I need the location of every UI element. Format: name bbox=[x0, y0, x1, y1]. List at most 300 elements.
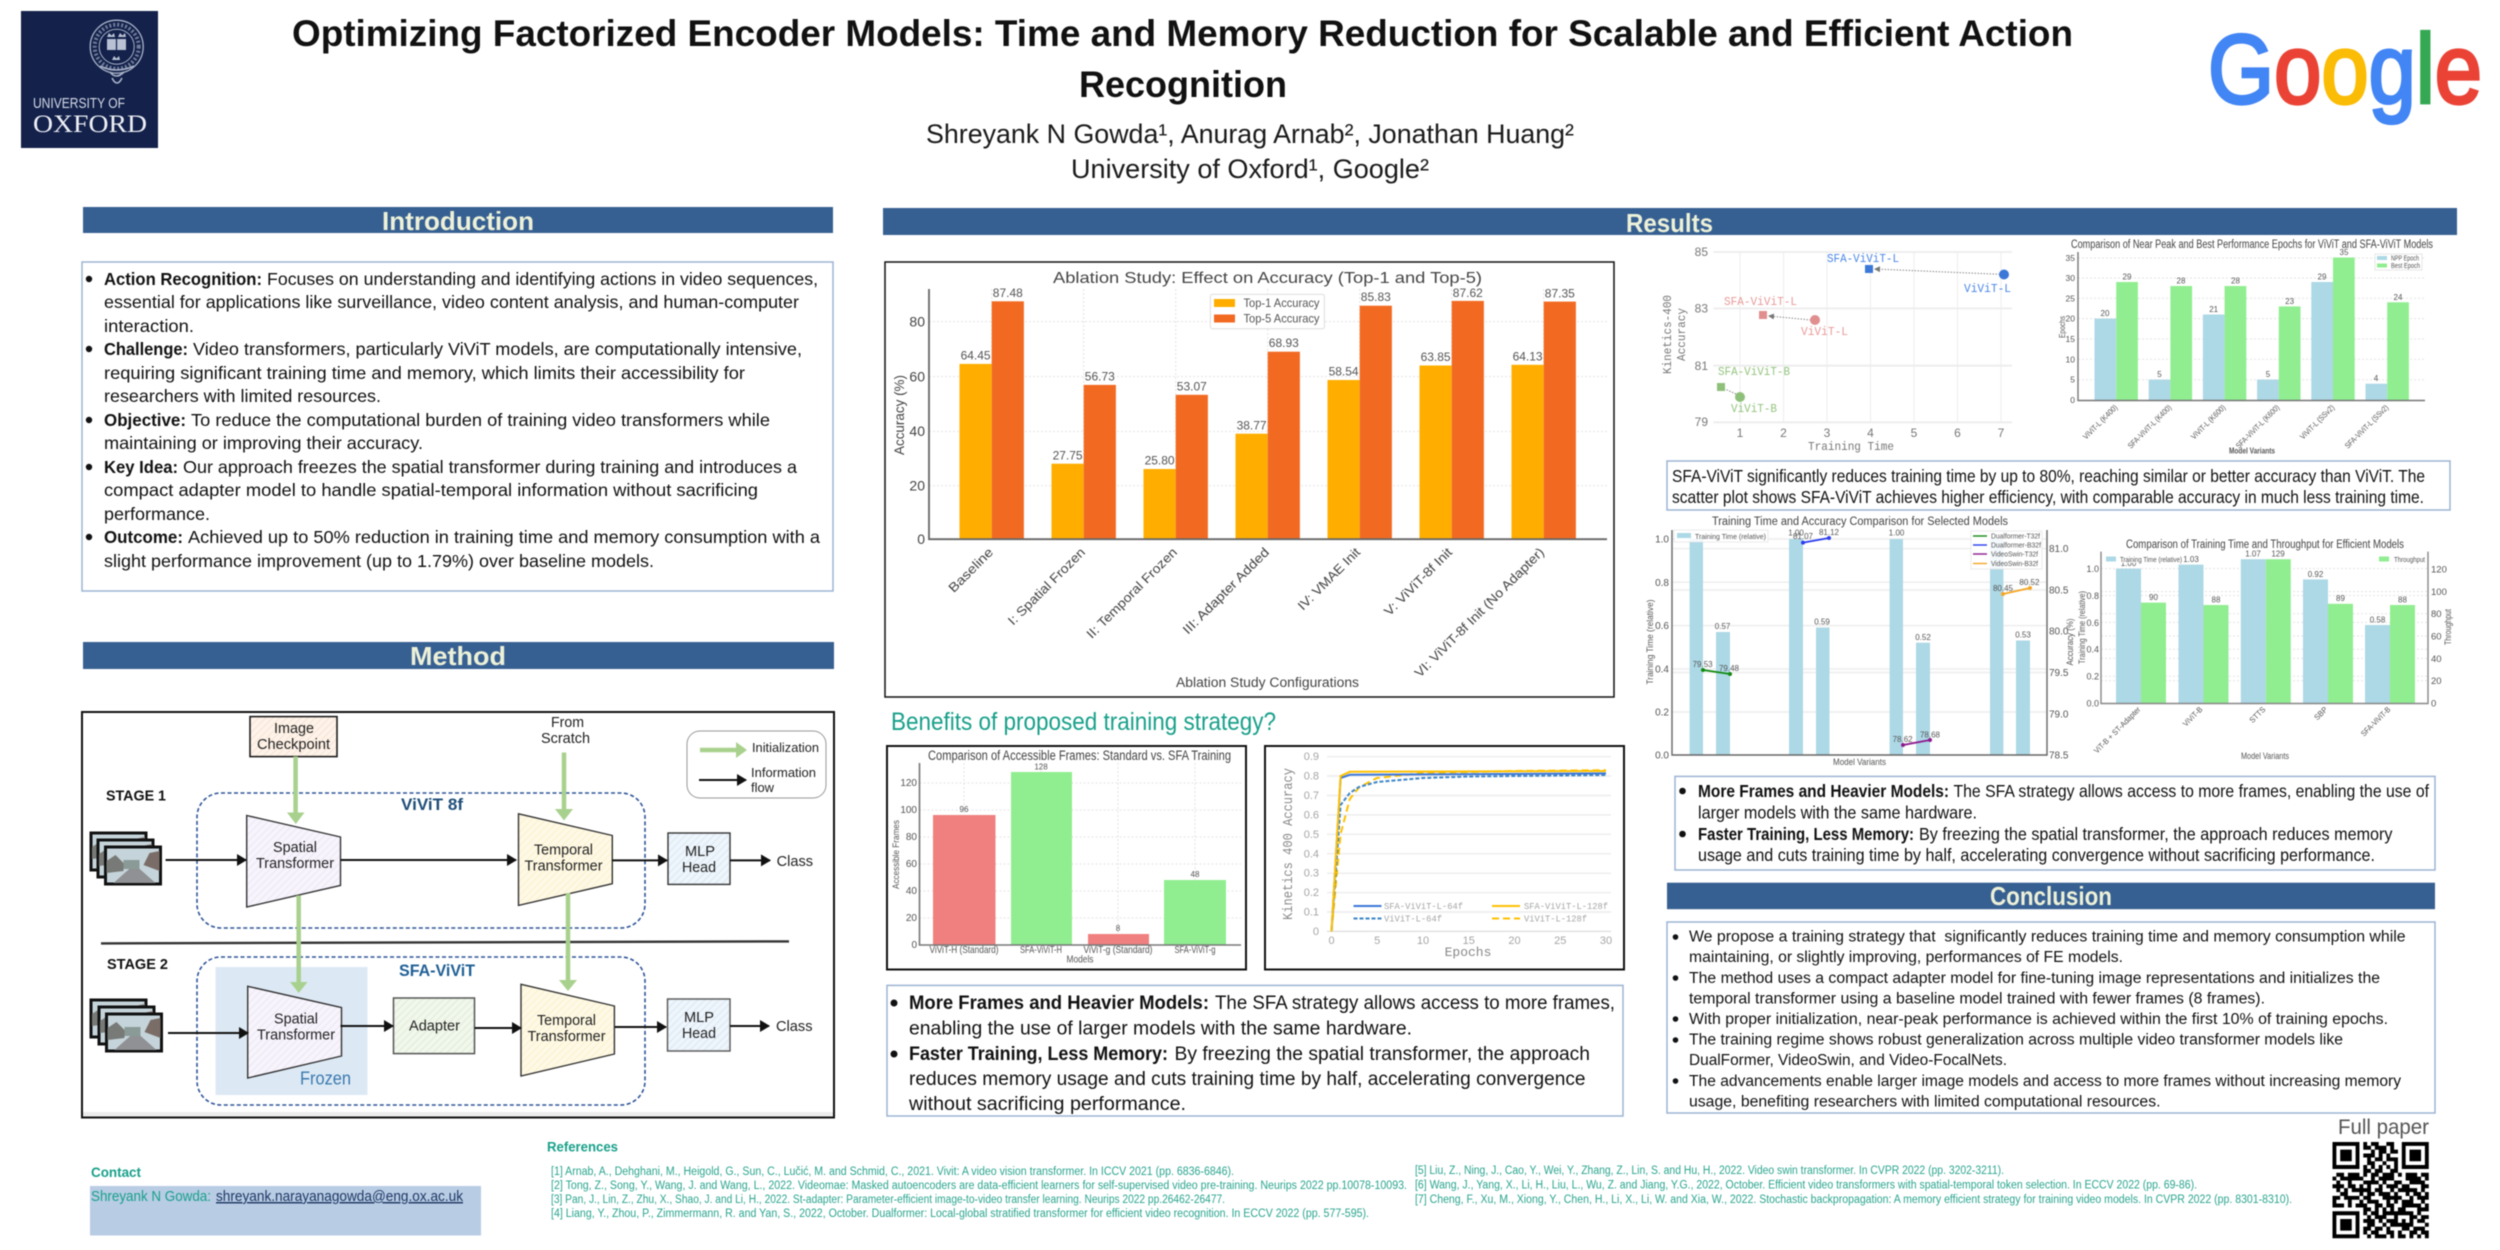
combo chart: training time and accuracy: 78.62 bbox=[1893, 735, 1913, 744]
combo chart: training time and accuracy: Training Time (relative) bbox=[1645, 600, 1655, 684]
panel: benefits text: The SFA strategy allows access to more frames, bbox=[1215, 993, 1615, 1014]
bar chart: near peak and best performance epochs: 5 bbox=[2070, 375, 2075, 385]
combo chart: training time and throughput: 89 bbox=[2336, 594, 2345, 603]
panel: accessible frames bar chart: ViViT-H (Standard) bbox=[930, 944, 998, 956]
legend: Top-1 Accuracy bbox=[1244, 296, 1320, 310]
bar chart: near peak and best performance epochs: 10 bbox=[2066, 354, 2075, 364]
MLP head stage 2 bbox=[668, 999, 730, 1051]
bar chart: near peak and best performance epochs: 4 bbox=[2374, 374, 2379, 383]
curve: ViViT-L-128f bbox=[1332, 770, 1606, 931]
panel: benefits text bbox=[887, 985, 1623, 1116]
panel: kinetics 400 accuracy line chart: 0.3 bbox=[1304, 868, 1319, 880]
legends: Throughput bbox=[2394, 557, 2425, 564]
scatter plot: training time vs accuracy: 1 bbox=[1737, 426, 1744, 440]
panel: accessible frames bar chart: 128 bbox=[1034, 762, 1048, 772]
panel: conclusion text: The training regime shows robust generalization across multiple video transformer models like bbox=[1689, 1032, 2343, 1048]
x axis category labels: VI: ViViT-8f Init (No Adapter) bbox=[1411, 545, 1547, 680]
x axis title: Ablation Study Configurations bbox=[1176, 675, 1359, 690]
panel: kinetics 400 accuracy line chart: 0.8 bbox=[1304, 770, 1319, 782]
bar chart: near peak and best performance epochs: 29 bbox=[2123, 272, 2132, 282]
value labels: 64.45 bbox=[961, 348, 991, 362]
legend: training time bbox=[1674, 530, 1768, 542]
scatter plot: training time vs accuracy: 7 bbox=[1998, 426, 2005, 440]
combo chart: training time and throughput: 88 bbox=[2212, 596, 2221, 604]
contact: Contact bbox=[91, 1165, 142, 1180]
MLP head stage 1: Head bbox=[682, 860, 716, 876]
panel: introduction text: Outcome: bbox=[104, 527, 183, 547]
bar chart: near peak and best performance epochs: 5 bbox=[2266, 370, 2271, 379]
combo chart: training time and throughput: 129 bbox=[2271, 550, 2285, 558]
panel: results text bbox=[1675, 776, 2435, 870]
panel: kinetics 400 accuracy line chart: 15 bbox=[1463, 935, 1475, 947]
spatial transformer stage 1: Transformer bbox=[256, 856, 334, 872]
combo chart: training time and throughput: 88 bbox=[2398, 596, 2407, 604]
bar chart: near peak and best performance epochs: 0 bbox=[2070, 395, 2075, 405]
combo chart: training time and throughput: 20 bbox=[2431, 676, 2442, 687]
panel: kinetics 400 accuracy line chart: 30 bbox=[1600, 935, 1612, 947]
references: [2] Tong, Z., Song, Y., Wang, J. and Wang, L., 2022. Videomae: Masked autoencoders are data-efficient learners for self-supervised video pre-training. Neurips 2022 pp.10078-10093. bbox=[551, 1180, 1407, 1192]
panel: introduction text: compact adapter model to handle spatial-temporal information without sacrificing bbox=[104, 480, 758, 500]
class label stage 1: Class bbox=[777, 854, 813, 870]
title: Optimizing Factorized Encoder Models: Time and Memory Reduction for Scalable and Efficient Action bbox=[292, 13, 2073, 54]
combo chart: training time and throughput: 0.6 bbox=[2086, 618, 2099, 628]
combo chart: training time and throughput: 90 bbox=[2149, 593, 2158, 602]
value labels: 25.80 bbox=[1145, 454, 1175, 468]
contact bbox=[90, 1165, 481, 1236]
combo chart: training time and accuracy: 80.5 bbox=[2049, 586, 2069, 596]
combo chart: training time and accuracy: 0.0 bbox=[1655, 750, 1669, 762]
combo chart: training time and throughput: 120 bbox=[2431, 564, 2447, 576]
contact: shreyank.narayanagowda@eng.ox.ac.uk bbox=[216, 1189, 464, 1205]
heading: Results: Results bbox=[1626, 208, 1713, 238]
bar chart: near peak and best performance epochs: 24 bbox=[2394, 293, 2403, 302]
panel: kinetics 400 accuracy line chart: 0.6 bbox=[1304, 809, 1319, 821]
panel: ablation study bar chart bbox=[885, 262, 1614, 697]
references: [3] Pan, J., Lin, Z., Zhu, X., Shao, J. and Li, H., 2022. St-adapter: Parameter-efficient image-to-video transfer learning. Neurips 2022 pp.26462-26477. bbox=[551, 1194, 1225, 1206]
panel: kinetics 400 accuracy line chart: 0 bbox=[1328, 935, 1335, 947]
combo chart: training time and accuracy: 79.53 bbox=[1693, 660, 1713, 669]
stage labels: STAGE 2 bbox=[107, 956, 168, 973]
panel: kinetics 400 accuracy line chart bbox=[1265, 746, 1624, 970]
legend: training time: Training Time (relative) bbox=[1695, 532, 1766, 541]
scatter plot: training time vs accuracy: SFA-ViViT-L bbox=[1724, 296, 1797, 309]
legend: models: VideoSwin-B32f bbox=[1991, 559, 2039, 568]
legend: models bbox=[1971, 531, 2042, 569]
scatter plot: training time vs accuracy: ViViT-L bbox=[1801, 326, 1848, 339]
scatter plot: training time vs accuracy: 2 bbox=[1780, 426, 1787, 440]
panel: kinetics 400 accuracy line chart: 0 bbox=[1313, 926, 1319, 938]
MLP head stage 1 bbox=[668, 833, 730, 884]
arrows stage 1 bbox=[166, 859, 770, 861]
value labels: 68.93 bbox=[1269, 336, 1299, 350]
panel: benefits text: without sacrificing performance. bbox=[908, 1094, 1186, 1115]
MLP head stage 2: MLP bbox=[684, 1010, 714, 1026]
bars top-5 bbox=[992, 301, 1576, 539]
panel: benefits text: More Frames and Heavier Models: bbox=[909, 993, 1209, 1014]
panel: accessible frames bar chart: Accessible Frames bbox=[891, 820, 902, 889]
authors and affiliations: Shreyank N Gowda¹, Anurag Arnab², Jonathan Huang² bbox=[926, 119, 1574, 149]
panel: introduction text: requiring significant training time and memory, which limits their accessibility for bbox=[104, 363, 745, 383]
accuracy lines bbox=[1703, 538, 2030, 745]
combo chart: training time and throughput: ViT-B + ST-Adapter bbox=[2092, 705, 2143, 755]
panel: conclusion text: The method uses a compact adapter model for fine-tuning image representations and initializes the bbox=[1689, 970, 2380, 987]
panel: conclusion text: temporal transformer using a baseline model trained with fewer frames (8 frames). bbox=[1689, 991, 2265, 1008]
scatter plot: training time vs accuracy: 6 bbox=[1954, 426, 1961, 440]
bars top-1 bbox=[960, 364, 1544, 539]
combo chart: training time and accuracy: 80.52 bbox=[2019, 578, 2040, 587]
x axis category labels: I: Spatial Frozen bbox=[1005, 545, 1088, 628]
panel: results text: usage and cuts training time by half, accelerating convergence without sacrificing performance. bbox=[1698, 845, 2375, 865]
panel: conclusion text: maintaining, or slightly improving, performances of FE models. bbox=[1689, 949, 2123, 966]
panel: benefits text: Faster Training, Less Memory: bbox=[909, 1044, 1168, 1065]
logo: University of Oxford: OXFORD bbox=[33, 111, 147, 138]
panel: conclusion text bbox=[1667, 922, 2435, 1113]
references: [5] Liu, Z., Ning, J., Cao, Y., Wei, Y., Zhang, Z., Lin, S. and Hu, H., 2022. Video swin transformer. In CVPR 2022 (pp. 3202-3211). bbox=[1415, 1165, 2004, 1177]
spatial transformer stage 1: Spatial bbox=[273, 840, 317, 856]
contact: Shreyank N Gowda: bbox=[91, 1189, 211, 1205]
panel: kinetics 400 accuracy line chart: Epochs bbox=[1445, 945, 1491, 960]
combo chart: training time and throughput: Comparison of Training Time and Throughput for Efficient Models bbox=[2126, 539, 2404, 551]
temporal transformer stage 2: Transformer bbox=[528, 1029, 606, 1045]
panel: accessible frames bar chart: 96 bbox=[960, 805, 969, 814]
legend: NPP Epoch bbox=[2391, 256, 2419, 262]
combo chart: training time and accuracy: 0.8 bbox=[1655, 578, 1669, 589]
curve: ViViT-L-64f bbox=[1332, 775, 1606, 931]
panel: introduction text: essential for applications like surveillance, video content analysis, and human-computer bbox=[104, 292, 799, 312]
panel: introduction text: Key Idea: bbox=[104, 457, 178, 477]
combo chart: training time and throughput: Model Variants bbox=[2241, 751, 2289, 761]
panel: kinetics 400 accuracy line chart: 25 bbox=[1554, 935, 1566, 947]
from scratch label bbox=[541, 715, 590, 747]
panel: accessible frames bar chart: SFA-ViViT-g bbox=[1174, 944, 1216, 956]
panel: introduction text: slight performance improvement (up to 1.79%) over baseline models. bbox=[104, 551, 654, 571]
panel: introduction text: To reduce the computational burden of training video transformers while bbox=[191, 410, 770, 430]
MLP head stage 1: MLP bbox=[685, 844, 715, 860]
heading: Results bbox=[883, 208, 2457, 238]
heading: Method: Method bbox=[410, 641, 506, 671]
legend: models: VideoSwin-T32f bbox=[1991, 550, 2039, 558]
combo chart: training time and throughput: 60 bbox=[2431, 632, 2442, 642]
heading: Introduction: Introduction bbox=[382, 206, 534, 236]
y axis ticks: 40 bbox=[909, 423, 925, 439]
x axis category labels: V: ViViT-8f Init bbox=[1381, 544, 1455, 619]
stage 2 frozen background bbox=[216, 967, 368, 1095]
combo chart: training time and accuracy: 1.00 bbox=[1788, 529, 1804, 538]
legend: Best Epoch bbox=[2391, 263, 2420, 270]
class label stage 2: Class bbox=[776, 1019, 812, 1035]
heading: Introduction bbox=[83, 206, 833, 236]
combo chart: training time and accuracy: 0.59 bbox=[1814, 618, 1830, 627]
dashed box: ViViT 8f bbox=[197, 793, 645, 928]
panel: kinetics 400 accuracy line chart: 0.9 bbox=[1304, 751, 1319, 763]
panel: introduction text: Our approach freezes the spatial transformer during training and introduces a bbox=[183, 457, 797, 477]
panel: kinetics 400 accuracy line chart: 5 bbox=[1374, 935, 1380, 947]
stage labels bbox=[106, 788, 168, 973]
image checkpoint box: Image bbox=[274, 721, 314, 737]
panel: kinetics 400 accuracy line chart: 0.2 bbox=[1304, 887, 1319, 899]
combo chart: training time and accuracy: 0.6 bbox=[1655, 621, 1669, 632]
combo chart: training time and throughput: Throughput bbox=[2443, 609, 2453, 645]
temporal transformer stage 1 bbox=[518, 814, 612, 905]
combo chart: training time and accuracy: 0.57 bbox=[1715, 622, 1731, 631]
combo chart: training time and throughput: 1.0 bbox=[2086, 564, 2099, 574]
combo chart: training time and throughput: Training Time (relative) bbox=[2077, 591, 2087, 664]
panel: introduction text: Video transformers, particularly ViViT models, are computationally intensive, bbox=[193, 339, 802, 359]
dashed box: ViViT 8f: ViViT 8f bbox=[401, 795, 463, 814]
panel: introduction text: researchers with limited resources. bbox=[104, 386, 381, 406]
legend: Top-5 Accuracy bbox=[1244, 312, 1320, 326]
green initialization arrows bbox=[287, 752, 577, 993]
combo chart: training time and throughput: 0.92 bbox=[2308, 570, 2324, 579]
title: Recognition bbox=[1079, 64, 1287, 105]
combo chart: training time and throughput: SFA-ViViT-B bbox=[2359, 705, 2392, 738]
y axis ticks: 60 bbox=[909, 368, 925, 384]
panel: results text: The SFA strategy allows access to more frames, enabling the use of bbox=[1954, 781, 2429, 801]
bar chart: near peak and best performance epochs: 35 bbox=[2066, 253, 2075, 263]
value labels: 27.75 bbox=[1053, 448, 1083, 462]
references bbox=[547, 1140, 2292, 1220]
heading: Conclusion bbox=[1667, 881, 2435, 911]
authors and affiliations bbox=[926, 119, 1574, 184]
temporal transformer stage 1: Temporal bbox=[534, 842, 593, 858]
arrows stage 2 bbox=[168, 1026, 769, 1033]
legend bbox=[687, 731, 826, 798]
y axis label: Accuracy (%) bbox=[891, 375, 907, 455]
combo chart: training time and accuracy: 79.5 bbox=[2049, 668, 2069, 679]
panel: conclusion text: With proper initialization, near-peak performance is achieved within the first 10% of training epochs. bbox=[1689, 1011, 2388, 1028]
bar chart: near peak and best performance epochs: ViViT-L (SSv2) bbox=[2298, 403, 2337, 441]
panel: accessible frames bar chart bbox=[887, 746, 1246, 970]
panel: kinetics 400 accuracy line chart: 10 bbox=[1417, 935, 1429, 947]
x axis category labels bbox=[945, 544, 1547, 680]
combo chart: training time and throughput: 1.03 bbox=[2183, 555, 2199, 564]
frozen label: Frozen bbox=[300, 1068, 351, 1088]
panel: introduction text: Objective: bbox=[104, 410, 186, 430]
temporal transformer stage 1: Transformer bbox=[524, 858, 603, 874]
bar chart: near peak and best performance epochs: 20 bbox=[2101, 309, 2110, 318]
panel: conclusion text: usage, benefiting researchers with limited computational resources. bbox=[1689, 1094, 2160, 1110]
panel: introduction text: Action Recognition: bbox=[104, 269, 262, 289]
combo chart: training time and throughput: SBP bbox=[2312, 705, 2329, 722]
scatter plot: training time vs accuracy: Accuracy bbox=[1675, 308, 1689, 361]
combo chart: training time and accuracy: 79.48 bbox=[1719, 664, 1740, 673]
divider between stages bbox=[101, 941, 789, 943]
x axis category labels: Baseline bbox=[945, 545, 996, 595]
bar chart: near peak and best performance epochs: SFA-ViViT-L (SSv2) bbox=[2343, 403, 2391, 450]
caption box: SFA-ViViT efficiency bbox=[1667, 461, 2450, 510]
logo: University of Oxford: UNIVERSITY OF bbox=[33, 96, 125, 112]
combo chart: training time and throughput: 1.00 bbox=[2121, 559, 2137, 568]
panel: accessible frames bar chart: 100 bbox=[900, 805, 917, 816]
combo chart: training time and throughput: ViViT-B bbox=[2181, 705, 2204, 728]
combo chart: training time and accuracy: 80.45 bbox=[1993, 584, 2014, 593]
value labels: 85.83 bbox=[1361, 290, 1391, 304]
spatial transformer stage 1 bbox=[247, 816, 340, 907]
scatter plot: training time vs accuracy: 4 bbox=[1867, 426, 1874, 440]
heading: Conclusion: Conclusion bbox=[1990, 881, 2112, 911]
legend: ViViT-L-64f bbox=[1384, 914, 1442, 924]
combo chart: training time and accuracy: 0.52 bbox=[1915, 633, 1931, 642]
combo chart: training time and accuracy: 78.5 bbox=[2049, 750, 2069, 762]
bar chart: near peak and best performance epochs: 20 bbox=[2066, 314, 2075, 324]
legend bbox=[2375, 254, 2422, 270]
y axis ticks: 80 bbox=[909, 314, 925, 330]
panel: kinetics 400 accuracy line chart: 20 bbox=[1508, 935, 1521, 947]
bar chart: near peak and best performance epochs: 21 bbox=[2209, 305, 2219, 314]
panel: results text: By freezing the spatial transformer, the approach reduces memory bbox=[1919, 824, 2393, 844]
scatter plot: training time vs accuracy: 5 bbox=[1911, 426, 1918, 440]
bar chart: near peak and best performance epochs: 15 bbox=[2066, 334, 2075, 344]
bar chart: near peak and best performance epochs: ViViT-L (K600) bbox=[2189, 403, 2228, 441]
panel: results text: larger models with the same hardware. bbox=[1698, 802, 1977, 822]
title bbox=[292, 13, 2073, 105]
input frames stage 1 bbox=[91, 833, 160, 884]
bar chart: near peak and best performance epochs bbox=[2058, 239, 2433, 456]
panel: accessible frames bar chart: 48 bbox=[1191, 870, 1200, 879]
panel: accessible frames bar chart: 0 bbox=[911, 940, 917, 951]
combo chart: training time and throughput: 100 bbox=[2431, 587, 2447, 598]
panel: introduction text bbox=[82, 262, 833, 591]
scatter plot: training time vs accuracy: SFA-ViViT-B bbox=[1718, 366, 1790, 379]
x axis category labels: III: Adapter Added bbox=[1179, 545, 1272, 637]
heading: Method bbox=[83, 641, 834, 671]
panel: introduction text: maintaining or improving their accuracy. bbox=[104, 433, 423, 453]
panel: benefits text: By freezing the spatial transformer, the approach bbox=[1174, 1044, 1590, 1065]
from scratch label: Scratch bbox=[541, 731, 590, 747]
panel: accessible frames bar chart: SFA-ViViT-H bbox=[1020, 944, 1062, 956]
scatter plot: training time vs accuracy: ViViT-L bbox=[1964, 283, 2011, 296]
y axis ticks: 0 bbox=[917, 531, 925, 547]
combo chart: training time and accuracy: 78.68 bbox=[1920, 730, 1941, 739]
legend bbox=[1210, 294, 1324, 329]
scatter plot: training time vs accuracy: 3 bbox=[1824, 426, 1831, 440]
combo chart: training time and throughput: STTS bbox=[2248, 705, 2267, 725]
panel: kinetics 400 accuracy line chart: 0.1 bbox=[1304, 907, 1319, 919]
bar chart: near peak and best performance epochs: 28 bbox=[2177, 276, 2186, 286]
scatter plot: training time vs accuracy: ViViT-B bbox=[1731, 403, 1777, 416]
panel: accessible frames bar chart: 40 bbox=[906, 886, 917, 897]
combo chart: training time and accuracy: 0.4 bbox=[1655, 664, 1669, 676]
bar chart: near peak and best performance epochs: SFA-ViViT-L (K600) bbox=[2234, 403, 2282, 450]
value labels: 87.62 bbox=[1453, 286, 1483, 300]
references: [7] Cheng, F., Xu, M., Xiong, Y., Chen, H., Li, X., Li, W. and Xia, W., 2022. Stochastic backpropagation: A memory efficient strategy for training video models. In CVPR 2022 (pp. 8301-8310). bbox=[1415, 1194, 2292, 1206]
value labels: 56.73 bbox=[1085, 370, 1115, 384]
combo chart: training time and throughput: 0 bbox=[2431, 698, 2436, 710]
spatial transformer stage 2 bbox=[248, 986, 342, 1078]
temporal transformer stage 2 bbox=[521, 984, 614, 1076]
logo: Google: Google bbox=[2208, 14, 2482, 124]
combo chart: training time and throughput: 0.2 bbox=[2086, 672, 2099, 682]
panel: accessible frames bar chart: ViViT-g (Standard) bbox=[1084, 944, 1152, 956]
legend: SFA-ViViT-L-64f bbox=[1384, 901, 1463, 912]
scatter plot: training time vs accuracy: Kinetics-400 bbox=[1661, 295, 1675, 374]
y axis ticks: 20 bbox=[909, 478, 925, 494]
scatter plot: training time vs accuracy: 79 bbox=[1695, 415, 1708, 429]
combo chart: training time and accuracy: 0.2 bbox=[1655, 708, 1669, 718]
bar chart: near peak and best performance epochs: 30 bbox=[2066, 273, 2075, 283]
bar chart: near peak and best performance epochs: 29 bbox=[2318, 272, 2327, 282]
legend: flow bbox=[751, 780, 775, 795]
combo chart: training time and throughput: 0.8 bbox=[2086, 591, 2099, 601]
legend: ViViT-L-128f bbox=[1524, 914, 1587, 924]
combo chart: training time and throughput: 1.07 bbox=[2245, 550, 2261, 558]
panel: conclusion text: We propose a training strategy that significantly reduces training time and memory consumption while bbox=[1689, 929, 2406, 946]
heading: Benefits: Benefits of proposed training strategy? bbox=[891, 708, 1276, 736]
bar chart: near peak and best performance epochs: 28 bbox=[2231, 276, 2240, 286]
spatial transformer stage 2: Transformer bbox=[257, 1028, 335, 1044]
references: [6] Wang, J., Yang, X., Li, H., Liu, L., Wu, Z. and Jiang, Y.G., 2022, October. Efficient video transformers with spatial-temporal token selection. In ECCV 2022 (pp. 69-86). bbox=[1415, 1180, 2197, 1192]
authors and affiliations: University of Oxford¹, Google² bbox=[1071, 154, 1429, 184]
panel: results text: More Frames and Heavier Models: bbox=[1698, 781, 1949, 801]
legends: Training Time (relative) bbox=[2120, 557, 2182, 564]
image checkpoint box bbox=[250, 717, 337, 757]
curve: SFA-ViViT-L-128f bbox=[1332, 771, 1606, 931]
combo chart: training time and throughput: 0.0 bbox=[2086, 698, 2099, 708]
panel: accessible frames bar chart: Models bbox=[1066, 954, 1094, 966]
value labels bbox=[961, 286, 1575, 468]
scatter plot: training time vs accuracy: Training Time bbox=[1808, 440, 1894, 454]
value labels: 64.13 bbox=[1513, 350, 1543, 364]
adapter box bbox=[394, 998, 474, 1054]
panel: introduction text: Achieved up to 50% reduction in training time and memory consumption with a bbox=[188, 527, 820, 547]
from scratch label: From bbox=[551, 715, 584, 731]
panel: conclusion text: The advancements enable larger image models and access to more frames without increasing memory bbox=[1689, 1073, 2401, 1090]
combo chart: training time and accuracy: Model Variants bbox=[1833, 757, 1886, 767]
scatter plot: training time vs accuracy: 81 bbox=[1695, 359, 1708, 373]
value labels: 53.07 bbox=[1177, 380, 1207, 394]
panel: method diagram bbox=[82, 712, 834, 1118]
combo chart: training time and throughput: 40 bbox=[2431, 654, 2442, 665]
panel: accessible frames bar chart: 80 bbox=[906, 832, 917, 843]
caption box: SFA-ViViT efficiency: SFA-ViViT significantly reduces training time by up to 80%, reaching similar or better accuracy than ViViT. The bbox=[1672, 466, 2425, 486]
QR code bbox=[2332, 1144, 2429, 1236]
panel: accessible frames bar chart: 60 bbox=[906, 859, 917, 870]
panel: results text: Faster Training, Less Memory: bbox=[1698, 824, 1914, 844]
combo chart: training time and accuracy: 81.07 bbox=[1793, 532, 1814, 541]
bar chart: near peak and best performance epochs: Epochs bbox=[2058, 316, 2067, 338]
combo chart: training time and accuracy: Training Time and Accuracy Comparison for Selected Models bbox=[1712, 516, 2008, 528]
references: [1] Arnab, A., Dehghani, M., Heigold, G., Sun, C., Lučić, M. and Schmid, C., 2021. Vivit: A video vision transformer. In ICCV 2021 (pp. 6836-6846). bbox=[551, 1166, 1234, 1178]
legend: SFA-ViViT-L-128f bbox=[1524, 901, 1608, 912]
scatter plot: training time vs accuracy: 85 bbox=[1695, 245, 1708, 259]
temporal transformer stage 2: Temporal bbox=[537, 1013, 596, 1029]
combo chart: training time and throughput: 80 bbox=[2431, 609, 2442, 620]
panel: introduction text: interaction. bbox=[104, 316, 194, 336]
caption box: SFA-ViViT efficiency: scatter plot shows SFA-ViViT achieves higher efficiency, with comparable accuracy in much less training time. bbox=[1672, 487, 2424, 507]
legend: Initialization bbox=[752, 740, 819, 755]
value labels: 63.85 bbox=[1421, 350, 1451, 364]
panel: kinetics 400 accuracy line chart: 0.7 bbox=[1304, 790, 1319, 802]
input frames stage 2 bbox=[91, 1000, 162, 1051]
combo chart: training time and accuracy: 81.0 bbox=[2049, 544, 2069, 555]
panel: benefits text: reduces memory usage and cuts training time by half, accelerating convergence bbox=[909, 1069, 1586, 1090]
panel: kinetics 400 accuracy line chart: 0.5 bbox=[1304, 829, 1319, 841]
legend: models: Dualformer-T32f bbox=[1991, 532, 2041, 540]
panel: introduction text: Challenge: bbox=[104, 339, 188, 359]
legend: models: Dualformer-B32f bbox=[1991, 540, 2042, 550]
panel: ablation study bar chart: Ablation Study: Effect on Accuracy (Top-1 and Top-5) bbox=[1053, 270, 1482, 287]
panel: accessible frames bar chart: Comparison of Accessible Frames: Standard vs. SFA Training bbox=[928, 748, 1231, 763]
references: [4] Liang, Y., Zhou, P., Zimmermann, R. and Yan, S., 2022, October. Dualformer: Local-global stratified transformer for efficient video recognition. In ECCV 2022 (pp. 577-595). bbox=[551, 1208, 1369, 1220]
dashed box: SFA-ViViT bbox=[197, 957, 645, 1105]
y axis ticks bbox=[909, 314, 925, 547]
combo chart: training time and throughput: 0.58 bbox=[2370, 616, 2386, 624]
references: References bbox=[547, 1140, 618, 1155]
bar chart: near peak and best performance epochs: 23 bbox=[2285, 297, 2295, 306]
panel: introduction text: performance. bbox=[104, 504, 210, 524]
bar chart: near peak and best performance epochs: 35 bbox=[2340, 248, 2349, 257]
combo chart: training time and accuracy: Accuracy (%) bbox=[2065, 618, 2075, 666]
